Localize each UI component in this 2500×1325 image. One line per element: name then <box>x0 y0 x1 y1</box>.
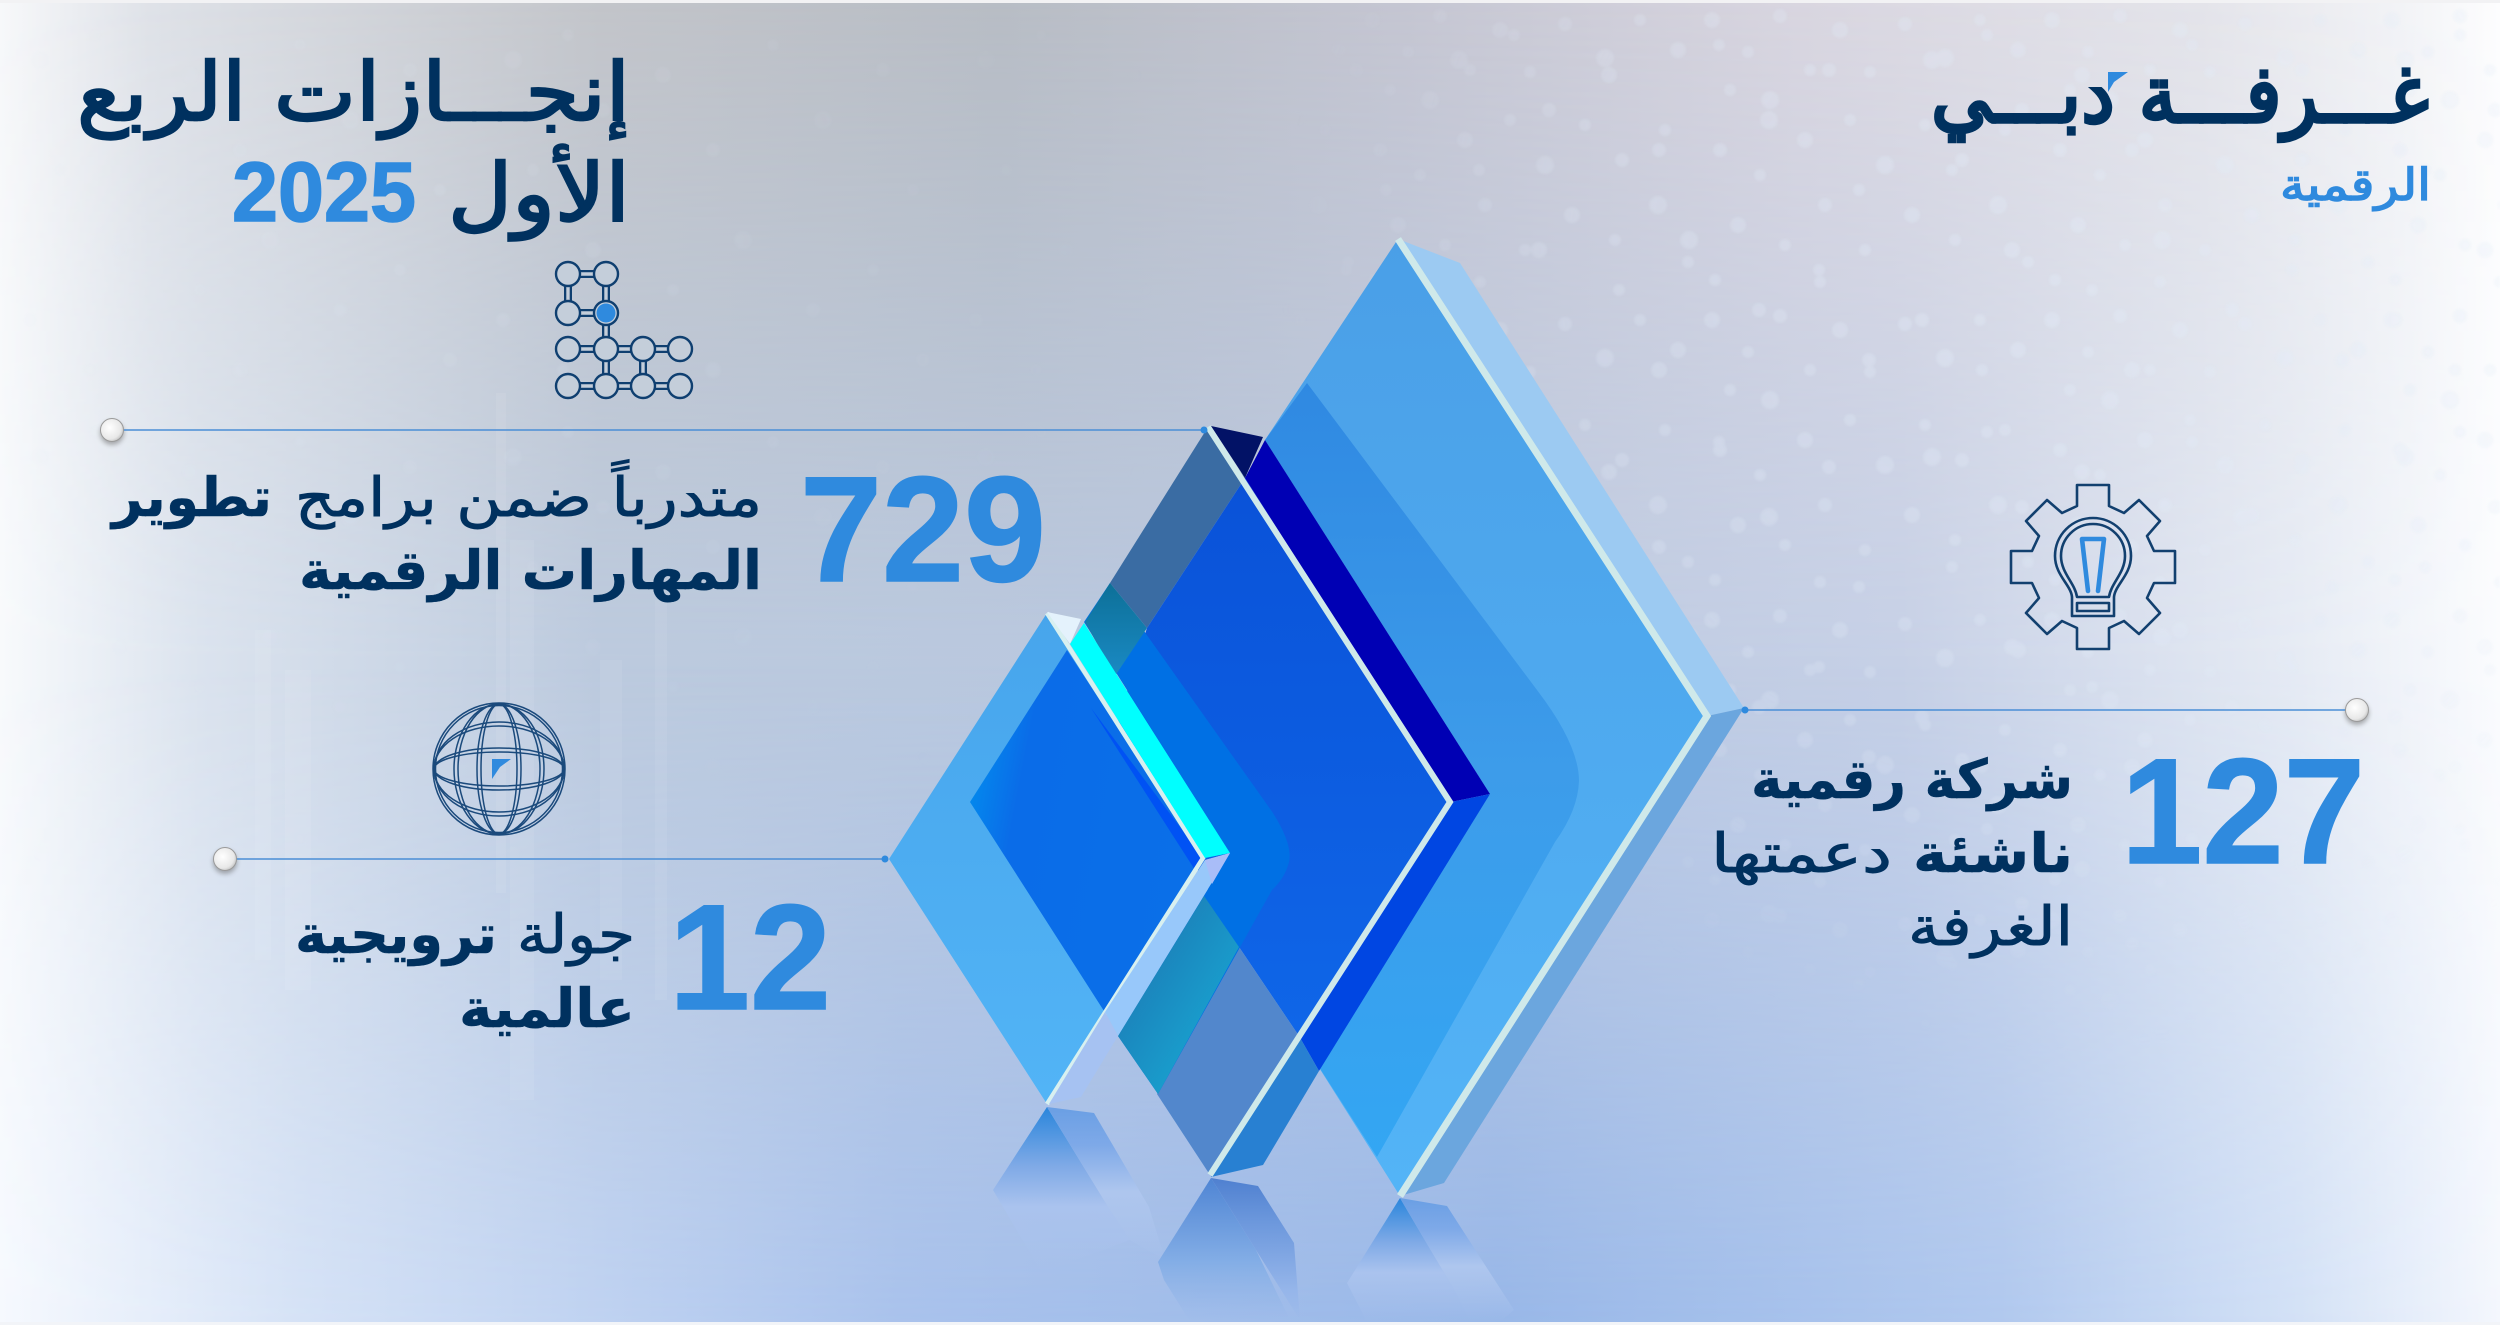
logo: Dubai Chamber Digital <box>1931 48 2431 211</box>
reflections <box>993 1107 1514 1322</box>
stat: 127 startups: الغرفة <box>1908 895 2073 958</box>
stat: 729 trainees: تطوير <box>109 466 272 529</box>
stat: 729 trainees: 729 <box>800 445 1046 613</box>
stat: 729 trainees: المهارات الرقمية <box>299 539 762 602</box>
icon: gear with bulb <box>2011 485 2175 649</box>
stat: 12 tours: 12 <box>669 873 831 1041</box>
stat: 127 startups: 127 <box>2121 727 2365 895</box>
big diamond <box>1265 239 1744 1196</box>
middle diamond <box>1110 426 1490 1177</box>
stat: 127 startups: ناشئة <box>1913 822 2073 885</box>
connector line: 12 <box>213 848 888 874</box>
stat: 127 startups: شركة رقمية <box>1751 748 2073 811</box>
title: إنجـــازات الربع <box>77 46 630 140</box>
title <box>77 46 630 241</box>
stat: 12 tours: ترويجية <box>295 903 497 966</box>
stat: 729 trainees <box>109 445 1046 613</box>
title: الأول <box>448 144 630 241</box>
icon: network <box>556 262 692 398</box>
stat: 127 startups <box>1711 727 2365 958</box>
connector line: 729 <box>100 418 1208 445</box>
stat: 12 tours <box>295 873 831 1041</box>
connector line: 127 <box>1742 698 2369 725</box>
icon: globe <box>433 703 565 835</box>
logo: Dubai Chamber Digital: غـــرفـــة دبـــي <box>1931 48 2429 142</box>
stat: 729 trainees: متدرباً ضمن برامج <box>295 459 762 530</box>
stat: 12 tours: جولة <box>517 903 635 966</box>
stat: 127 startups: دعمتها <box>1711 822 1892 885</box>
small diamond <box>889 583 1290 1104</box>
stat: 12 tours: عالمية <box>459 977 635 1040</box>
logo: Dubai Chamber Digital: الرقمية <box>2280 160 2431 211</box>
diamond graphic <box>889 239 1744 1322</box>
title: 2025 <box>232 145 416 239</box>
